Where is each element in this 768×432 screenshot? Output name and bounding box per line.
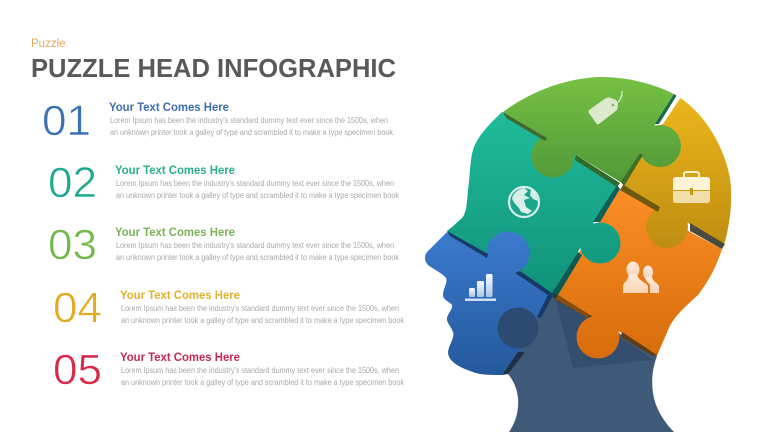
item 01: 01 bbox=[42, 97, 91, 145]
piece: teal bbox=[447, 112, 620, 293]
item 04: an unknown printer took a galley of type and scrambled it to make a type specimen book bbox=[121, 316, 405, 325]
item 03: 03 bbox=[48, 221, 97, 269]
icon: globe bbox=[509, 187, 539, 217]
item 05 bbox=[53, 346, 405, 394]
eyebrow label: Puzzle bbox=[31, 38, 66, 50]
icon: bar chart bbox=[465, 274, 496, 301]
item 01: Lorem Ipsum has been the industry's standard dummy text ever since the 1500s, when bbox=[110, 116, 388, 125]
icon: price tag bbox=[588, 91, 622, 124]
icon: briefcase bbox=[673, 172, 710, 203]
item 03: Lorem Ipsum has been the industry's standard dummy text ever since the 1500s, when bbox=[116, 241, 394, 250]
item 01: an unknown printer took a galley of type and scrambled it to make a type specimen book bbox=[110, 128, 394, 137]
item 04: Lorem Ipsum has been the industry's standard dummy text ever since the 1500s, when bbox=[121, 304, 399, 313]
item 05: 05 bbox=[53, 346, 102, 394]
item 02: an unknown printer took a galley of type and scrambled it to make a type specimen book bbox=[116, 191, 400, 200]
item 02 bbox=[48, 159, 400, 207]
item 02: Your Text Comes Here bbox=[115, 163, 235, 177]
item 01: Your Text Comes Here bbox=[109, 100, 229, 114]
item 05: Lorem Ipsum has been the industry's standard dummy text ever since the 1500s, when bbox=[121, 366, 399, 375]
cut shadows bbox=[552, 185, 725, 356]
item 03 bbox=[48, 221, 400, 269]
neck bbox=[500, 176, 674, 432]
item 04: 04 bbox=[53, 284, 102, 332]
piece: orange bbox=[558, 189, 722, 358]
puzzle head bbox=[425, 77, 731, 432]
piece: gold bbox=[622, 97, 731, 248]
item 05: an unknown printer took a galley of type and scrambled it to make a type specimen book bbox=[121, 378, 405, 387]
title: PUZZLE HEAD INFOGRAPHIC bbox=[31, 55, 396, 83]
piece: green bbox=[503, 77, 681, 187]
item 04 bbox=[53, 284, 405, 332]
item 02: Lorem Ipsum has been the industry's standard dummy text ever since the 1500s, when bbox=[116, 179, 394, 188]
item 04: Your Text Comes Here bbox=[120, 288, 240, 302]
item 03: an unknown printer took a galley of type and scrambled it to make a type specimen book bbox=[116, 253, 400, 262]
icon: people bbox=[623, 262, 659, 293]
item 05: Your Text Comes Here bbox=[120, 350, 240, 364]
item 03: Your Text Comes Here bbox=[115, 225, 235, 239]
item 02: 02 bbox=[48, 159, 97, 207]
item 01 bbox=[42, 97, 394, 145]
piece: blue bbox=[425, 231, 553, 375]
